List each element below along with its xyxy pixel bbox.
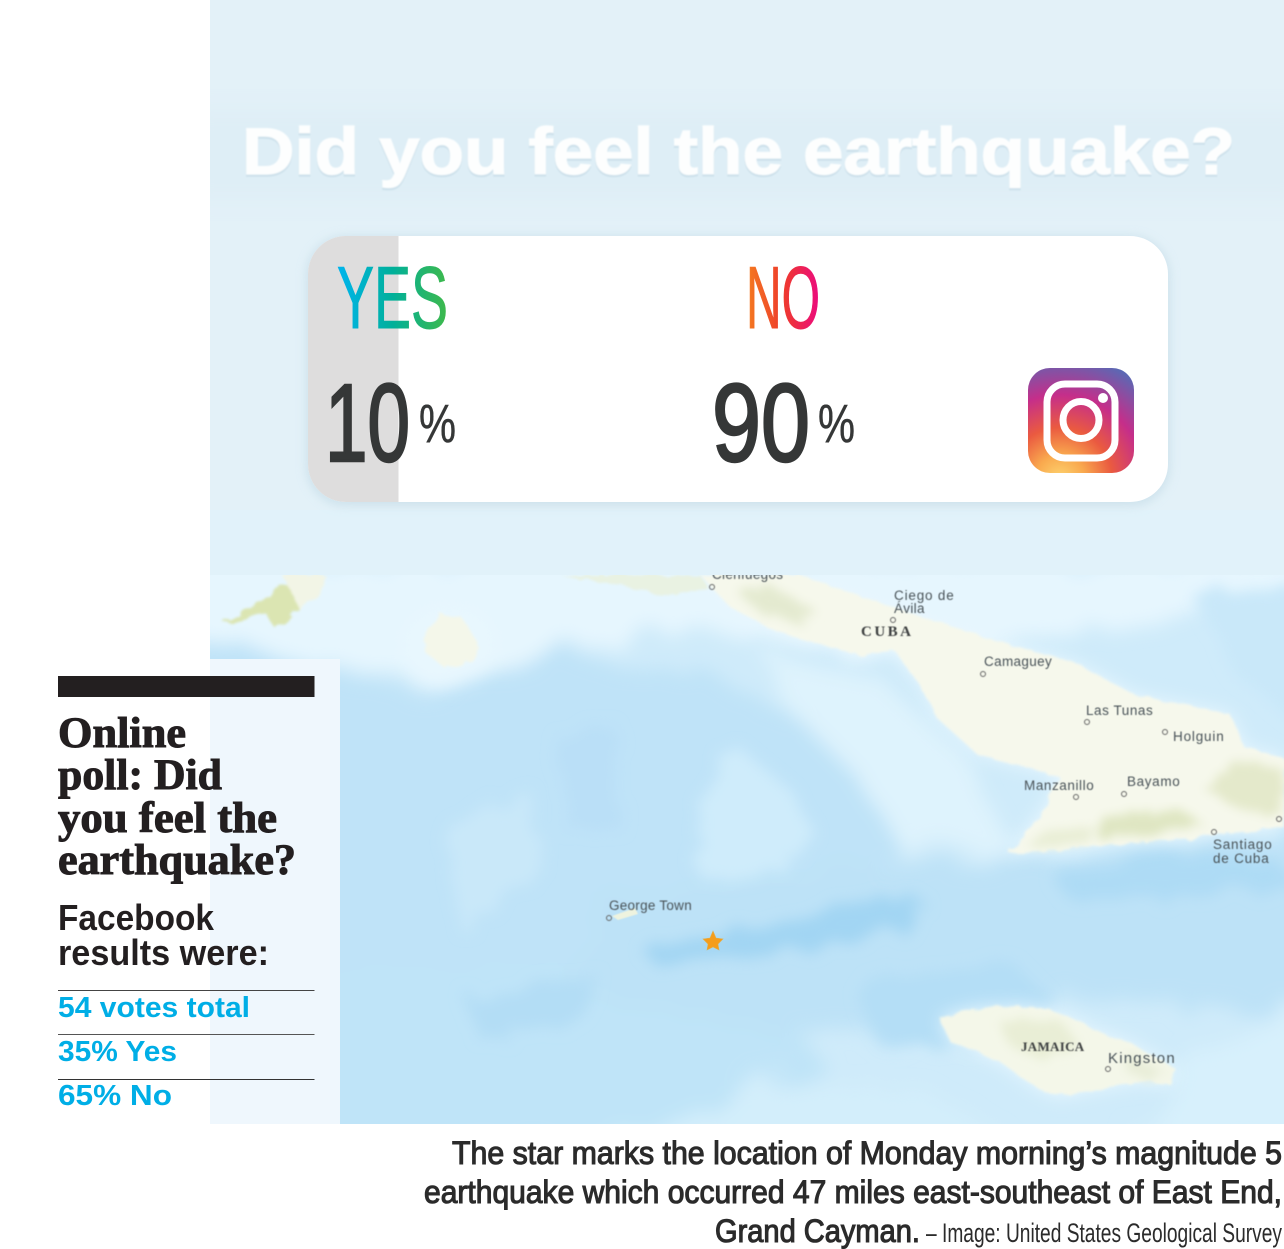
- label: YES: YES: [337, 248, 448, 347]
- panel: translucent sidebar over map: [210, 659, 340, 1124]
- value: 10 percent: 10: [325, 362, 410, 485]
- map labels: Las Tunas: [1086, 703, 1153, 718]
- subheading: Facebook results: [58, 897, 269, 973]
- sidebar: black header bar: [58, 676, 314, 697]
- title: Did you feel the earthquake?: Did you feel the earthquake?: [242, 114, 1235, 188]
- value: 90 percent: 90: [712, 362, 810, 485]
- map labels: Santiago: [1213, 837, 1272, 852]
- top panel: pale blue background: [180, 0, 1284, 575]
- results list: 65% No: [58, 1080, 172, 1112]
- map labels: Ciego de: [894, 588, 954, 603]
- results list: [58, 990, 314, 1112]
- results list: 35% Yes: [58, 1036, 177, 1068]
- map labels: [606, 567, 1282, 1072]
- heading: Online poll: [58, 710, 296, 884]
- map labels: Bayamo: [1127, 774, 1180, 789]
- heading: Online poll: Online: [58, 710, 186, 757]
- land: western Cuba peninsula: [222, 575, 325, 628]
- map labels: Manzanillo: [1024, 778, 1094, 793]
- map labels: CUBA: [861, 624, 914, 640]
- land: Jamaica: [940, 1006, 1175, 1097]
- ocean depth shading: [190, 560, 1284, 1150]
- results list: 54 votes total: [58, 992, 250, 1024]
- poll card: [306, 236, 1170, 506]
- map labels: Holguin: [1173, 729, 1224, 744]
- label: NO: NO: [746, 248, 820, 347]
- value: 90 percent: %: [818, 394, 855, 454]
- value: 10 percent: %: [419, 394, 456, 454]
- subheading: Facebook results: results were:: [58, 932, 269, 973]
- land: Grand Cayman: [612, 908, 638, 920]
- subheading: Facebook results: Facebook: [58, 897, 215, 938]
- icon: Instagram logo: [1028, 368, 1134, 473]
- yes result bar: [308, 236, 398, 502]
- title: Did you feel the earthquake?: Did you feel the earthquake?: [242, 116, 1235, 190]
- map labels: Cienfuegos: [712, 567, 783, 582]
- land: Isle of Youth: [425, 613, 480, 668]
- icon: earthquake star marker: [703, 931, 723, 950]
- map labels: de Cuba: [1213, 851, 1269, 866]
- heading: Online poll: you feel the: [58, 795, 277, 842]
- map labels: Camaguey: [984, 654, 1052, 669]
- coastal shallows: [440, 644, 1281, 1099]
- map labels: Ávila: [894, 601, 925, 616]
- map: Cuba, Cayman Islands and Jamaica: [190, 560, 1284, 1150]
- map labels: JAMAICA: [1021, 1039, 1085, 1054]
- map labels: George Town: [609, 898, 692, 913]
- caption: [424, 1135, 1282, 1249]
- caption: Grand Cayman.: [715, 1213, 920, 1249]
- land: Cuba: [560, 575, 1284, 853]
- heading: Online poll: poll: Did: [58, 752, 222, 799]
- map labels: Kingston: [1108, 1050, 1175, 1067]
- heading: Online poll: earthquake?: [58, 837, 296, 884]
